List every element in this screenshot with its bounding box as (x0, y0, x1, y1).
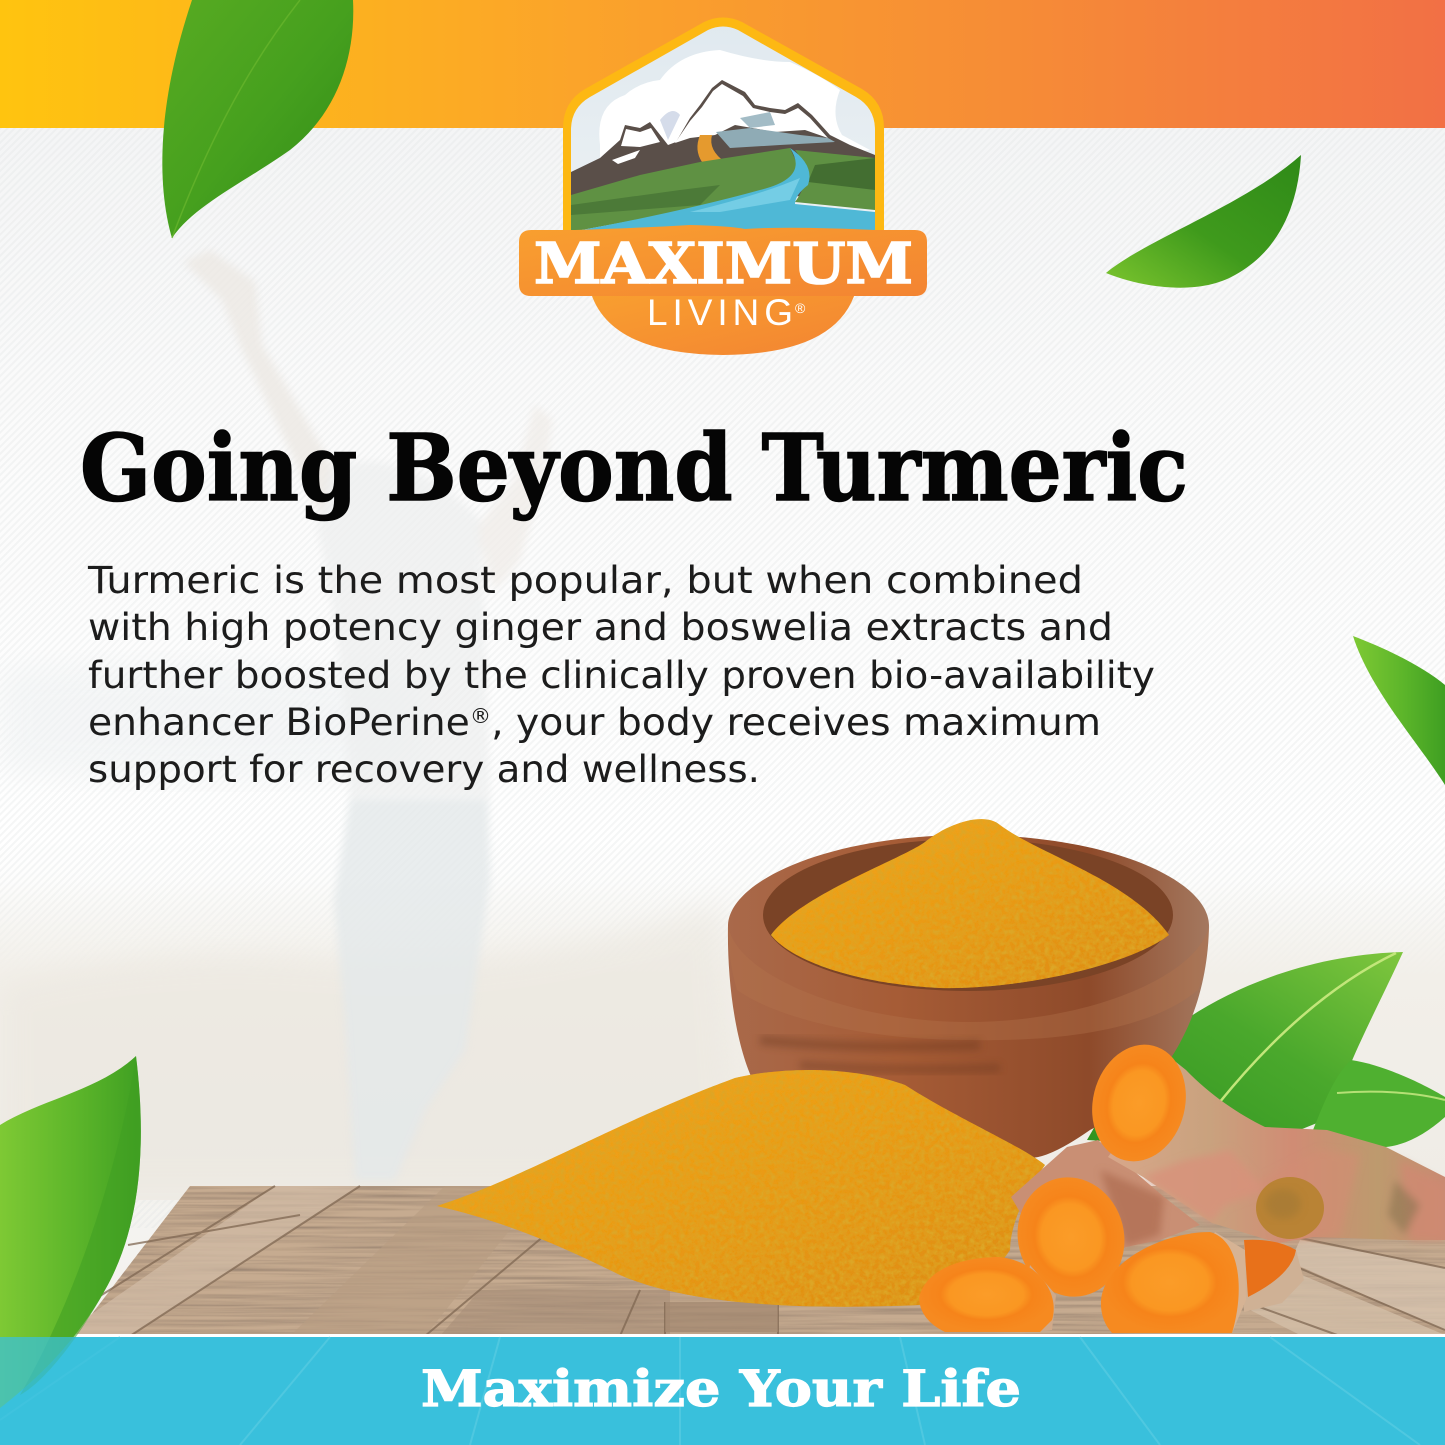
bowl wood streaks (760, 1040, 1000, 1069)
body text: enhancer BioPerine (88, 701, 448, 744)
faded woman silhouette (184, 250, 552, 1180)
leaf: top right (1106, 155, 1301, 288)
title: Going Beyond Turmeric (80, 414, 1188, 522)
registered mark: ® (795, 300, 806, 316)
body text: further boosted by the clinically proven bio-availability (88, 654, 1155, 697)
root skin patches (1143, 1150, 1445, 1243)
patterned tile (665, 1302, 778, 1332)
small back slice (1244, 1240, 1304, 1312)
body text: with high potency ginger and boswelia extracts and (88, 606, 1113, 649)
leaf: bottom left (0, 1056, 141, 1445)
turmeric roots (919, 1035, 1445, 1333)
slice centre (1150, 1232, 1246, 1333)
logo (519, 18, 927, 355)
root: lower behind (1011, 1140, 1200, 1280)
body text (87, 559, 1155, 791)
body text: ® (470, 704, 491, 728)
root: upper main (1108, 1062, 1445, 1243)
wooden bowl (728, 819, 1209, 1158)
slice front (1020, 1265, 1056, 1333)
logo orange base (590, 290, 856, 355)
footer tagline: Maximize Your Life (421, 1359, 1021, 1418)
slice left (1005, 1166, 1137, 1308)
river (571, 148, 875, 232)
powder in bowl (771, 819, 1169, 988)
root knob (1256, 1177, 1324, 1239)
slice top (1080, 1035, 1198, 1171)
logo wordmark: MAXIMUM (534, 231, 913, 297)
mountains (571, 80, 875, 200)
body text: Turmeric is the most popular, but when combined (87, 559, 1083, 602)
wood floor (60, 1186, 1445, 1336)
powder pile (437, 1070, 1045, 1307)
big leaves behind turmeric (1087, 952, 1445, 1150)
leaf: right edge (1353, 636, 1445, 785)
logo scene (571, 26, 875, 230)
logo subtitle: LIVING (647, 292, 793, 333)
footer band (0, 1334, 1445, 1445)
body text: , your body receives maximum (491, 701, 1101, 744)
green hills (571, 148, 800, 232)
top gradient band (0, 0, 1445, 128)
leaf: top left (162, 0, 353, 238)
body text: support for recovery and wellness. (88, 748, 760, 791)
